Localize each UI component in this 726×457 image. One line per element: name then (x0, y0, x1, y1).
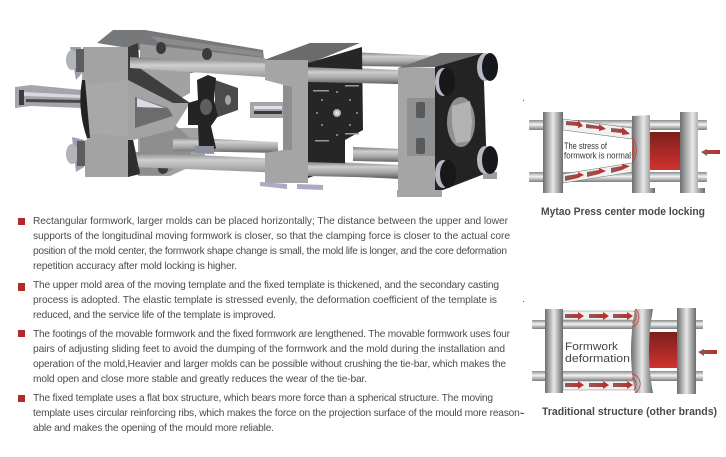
lower front bar over platen (308, 162, 398, 178)
left platen (543, 112, 563, 193)
paragraph 3 (18, 329, 511, 385)
paragraph 4 (18, 393, 523, 434)
rear frame top (97, 30, 265, 75)
tiny marks (521, 100, 524, 414)
diagram label: Formwork (565, 341, 619, 353)
paragraph 2 (18, 280, 499, 321)
paragraph 3: operation of the mold,Heavier and larger molds can be possible without crushing the tie-bar, which makes the (33, 359, 506, 370)
rear frame middle (138, 60, 205, 176)
fixed platen (397, 53, 497, 197)
left nuts (66, 47, 85, 172)
middle platen (632, 115, 655, 193)
press arrow (698, 349, 717, 356)
paragraph 1 (18, 216, 510, 272)
caption: center mode locking: Mytao Press center mode locking (541, 206, 705, 218)
moving platen dark mold face (264, 43, 363, 178)
lower front tie bar (132, 152, 400, 179)
left platen (545, 309, 563, 393)
diagram label: formwork is normal (564, 150, 631, 162)
paragraph 4: The fixed template uses a flat box structure, which bears more force than a spherical structure. The moving (33, 393, 493, 404)
bullet (18, 395, 25, 402)
right platen (680, 112, 705, 193)
bullet (18, 330, 25, 337)
diagram label: The stress of (564, 141, 607, 152)
paragraph 2: process is adopted. The elastic template is stressed evenly, the deformation coefficient of the template is (33, 295, 497, 306)
injection cylinder (15, 85, 82, 108)
rear platen (80, 43, 190, 177)
moving platen body (260, 60, 323, 190)
lower tie bar back (353, 147, 402, 162)
diagram: center mode locking (529, 112, 720, 193)
inner lower tie bar (173, 137, 278, 153)
right platen (677, 308, 696, 394)
diagram label: deformation (565, 353, 630, 365)
stress rings (632, 137, 636, 163)
toggle mechanism (188, 75, 238, 154)
straight ribs (563, 311, 635, 320)
paragraph 1: supports of the longitudinal moving formwork is closer, so that the clamping force is closer to the actual core (33, 231, 510, 242)
rear lower recess (140, 125, 192, 175)
fixed platen nuts (435, 53, 498, 188)
red mold (649, 332, 677, 368)
curved platen (631, 309, 653, 393)
red mold (650, 132, 680, 170)
bullet (18, 218, 25, 225)
bullet (18, 283, 25, 291)
caption: traditional structure: Traditional structure (other brands) (542, 406, 717, 418)
stress arrows (565, 120, 630, 181)
upper front tie bar (130, 57, 400, 84)
upper front bar over platen (308, 67, 398, 84)
tie bars (529, 120, 707, 130)
paragraph 2: reduced, and the service life of the template is improved. (33, 310, 276, 321)
diagram label (565, 341, 630, 365)
stress arrows (565, 312, 633, 389)
paragraph 3: pairs of adjusting sliding feet to avoid the dumping of the formwork and the mold during the installation and (33, 344, 505, 355)
paragraph 3: The footings of the movable formwork and the fixed formwork are lengthened. The movable formwork uses four (33, 329, 511, 340)
paragraph 1: repetition accuracy after mold locking is higher. (33, 261, 237, 272)
stress rings (632, 309, 640, 393)
paragraph 2: The upper mold area of the moving template and the fixed template is thickened, and the secondary casting (33, 280, 499, 291)
paragraph 4: able and makes the opening of the mould more reliable. (33, 423, 274, 434)
angled ribs (563, 119, 632, 139)
small ejector cylinder (250, 102, 283, 118)
paragraph 1: position of the mold center, the formwork shape change is small, the mold life is longer, and the core deformation (33, 246, 507, 257)
paragraph 4: template uses circular reinforcing ribs, which makes the force on the projection surface of the mould more reason- (33, 408, 523, 419)
diagram: traditional structure (532, 308, 717, 394)
tie bars (532, 320, 703, 329)
machine illustration (15, 30, 498, 197)
diagram label (564, 141, 631, 162)
paragraph 1: Rectangular formwork, larger molds can be placed horizontally; The distance between the upper and lower (33, 216, 509, 227)
upper tie bar back (350, 52, 440, 67)
rear lower block (85, 140, 128, 177)
paragraph 3: mold open and close more stable and greatly reduces the wear of the tie-bar. (33, 374, 367, 385)
press arrow (701, 149, 720, 156)
